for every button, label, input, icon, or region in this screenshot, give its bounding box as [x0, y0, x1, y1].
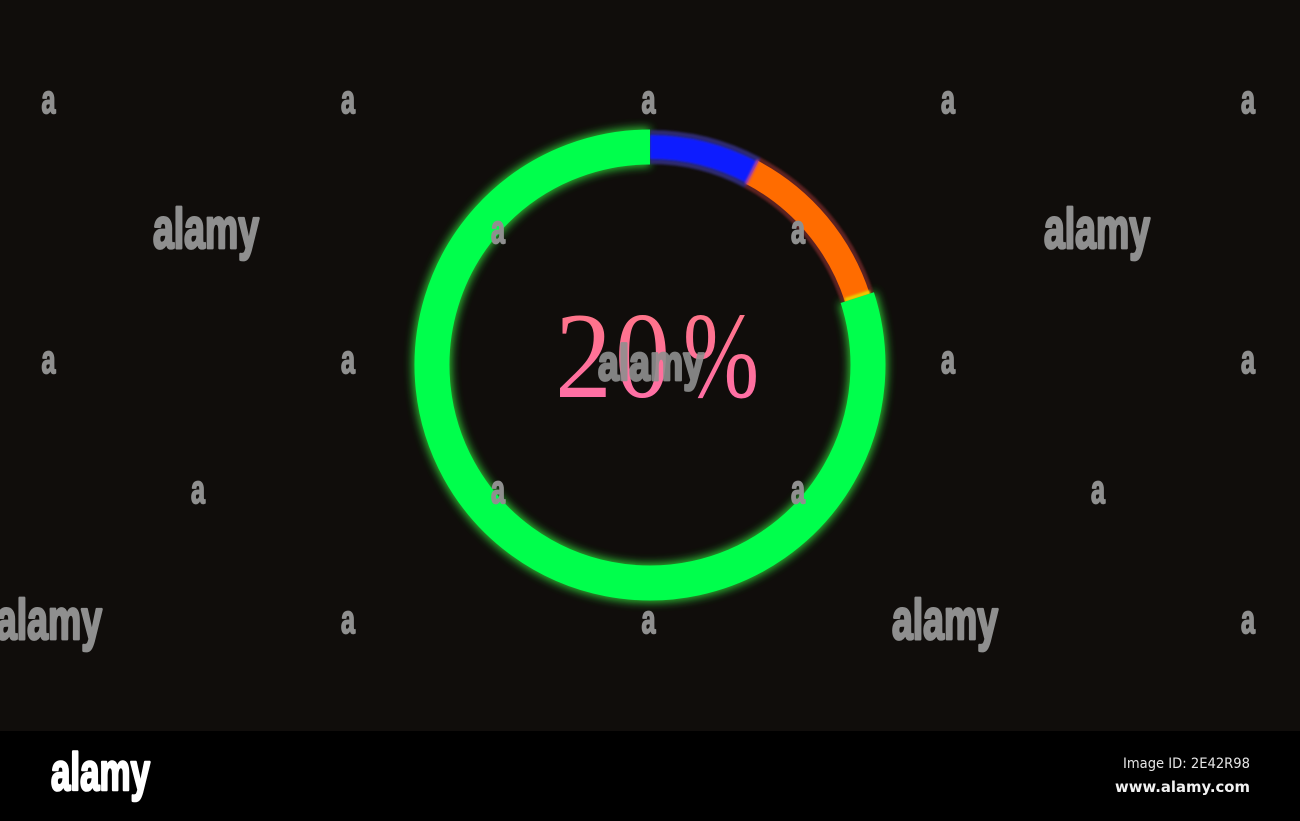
large watermarks: alamy — [892, 588, 998, 652]
footer bar — [0, 731, 1300, 821]
small watermarks: a — [1241, 338, 1255, 383]
percentage value: 2 — [555, 287, 612, 424]
small watermarks: a — [941, 78, 955, 123]
small watermarks: a — [341, 598, 355, 643]
percentage value: % — [683, 287, 759, 424]
small watermarks: a — [41, 78, 56, 123]
small watermarks: a — [491, 208, 505, 253]
small watermarks: a — [341, 78, 355, 123]
small watermarks: a — [1241, 598, 1255, 643]
percentage value — [555, 287, 759, 424]
percentage value: 0 — [615, 287, 670, 424]
image id: Image ID: 2E42R98 — [1123, 756, 1250, 772]
segment seam: blue to orange — [746, 160, 758, 184]
small watermarks: a — [641, 598, 656, 643]
orange segment — [752, 172, 857, 298]
small watermarks: a — [1241, 78, 1255, 123]
small watermarks: a — [641, 78, 656, 123]
segment seam: orange to green — [845, 292, 870, 300]
green segment — [432, 147, 868, 583]
small watermarks: a — [1091, 468, 1105, 513]
small watermarks: a — [41, 338, 56, 383]
large watermarks — [0, 197, 1150, 652]
small watermarks: a — [191, 468, 205, 513]
small watermarks: a — [791, 468, 805, 513]
donut chart: 20% progress ring — [432, 147, 870, 583]
large watermarks: alamy — [0, 588, 102, 652]
large watermarks: alamy — [598, 335, 704, 391]
small watermarks — [41, 78, 1255, 643]
arc halo: blue and orange segments — [650, 147, 857, 298]
small watermarks: a — [341, 338, 355, 383]
green ring glow — [432, 147, 868, 583]
footer logo: alamy — [51, 743, 150, 802]
large watermarks: alamy — [153, 197, 259, 261]
large watermarks: alamy — [1044, 197, 1150, 261]
small watermarks: a — [941, 338, 955, 383]
small watermarks: a — [791, 208, 805, 253]
small watermarks: a — [491, 468, 505, 513]
website: www.alamy.com — [1115, 778, 1250, 796]
blue segment — [650, 147, 752, 172]
